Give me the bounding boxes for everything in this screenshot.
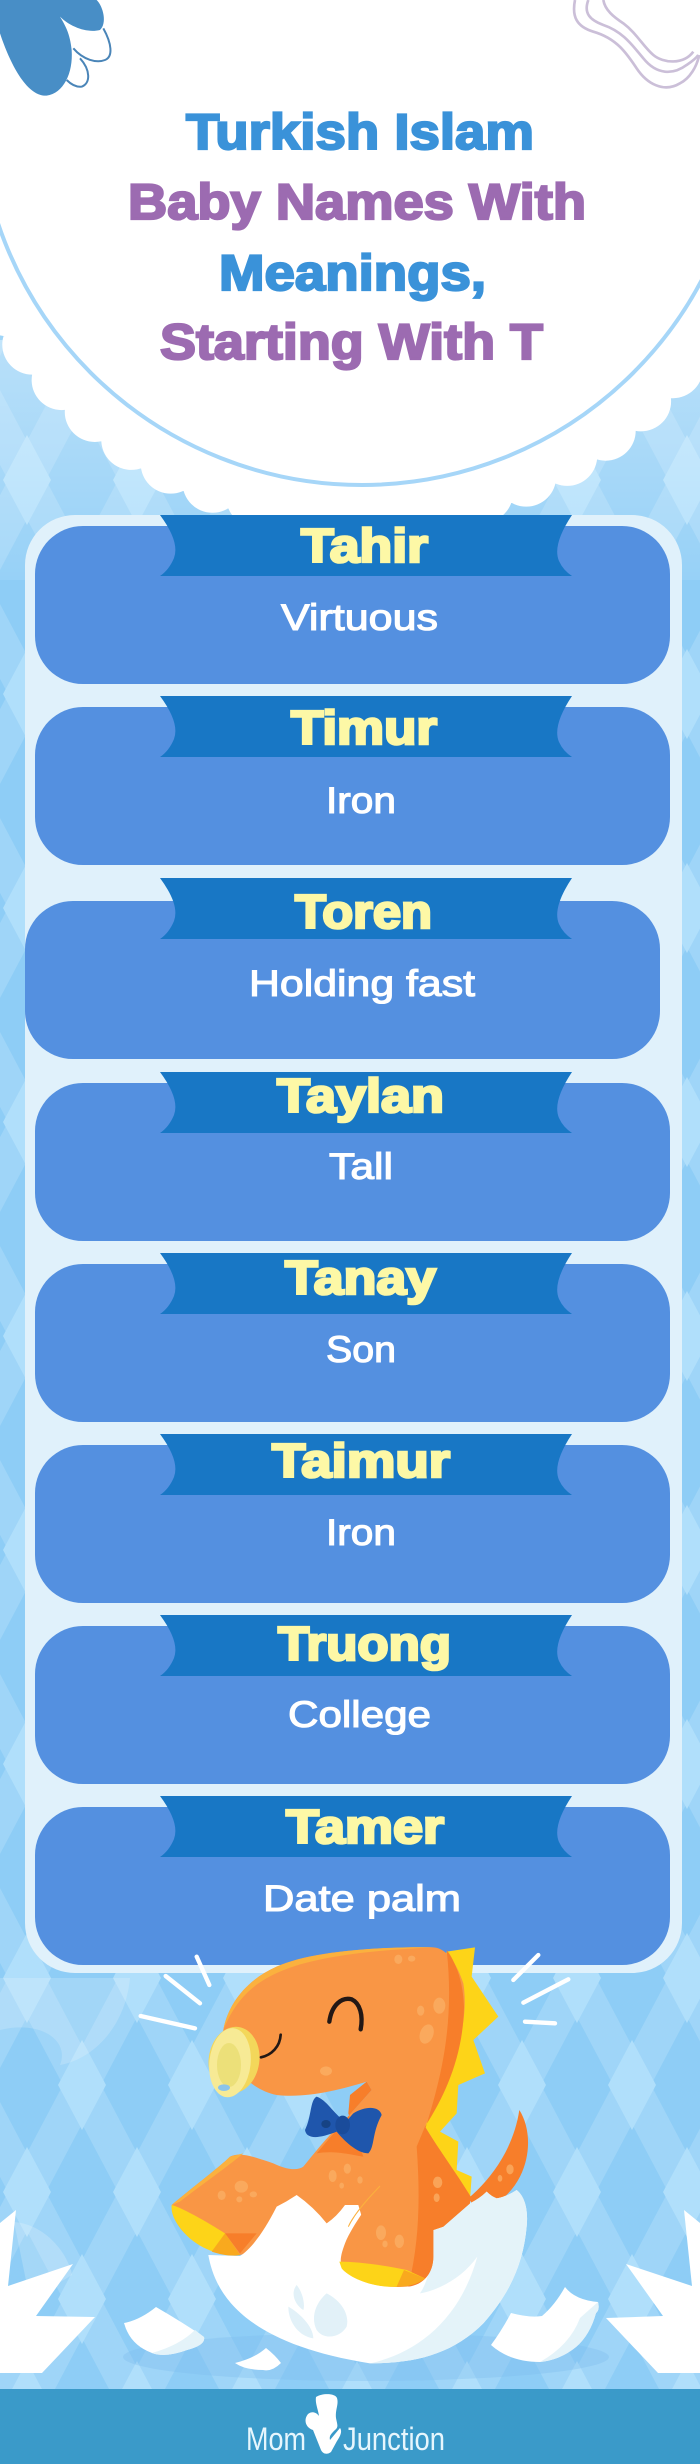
card: Taylan: Tall [329, 1146, 393, 1187]
card: Taimur [35, 1434, 670, 1603]
logo: MomJunction: Junction [343, 2421, 445, 2457]
card: Timur [35, 696, 670, 865]
card: Tahir: Virtuous [281, 597, 438, 638]
left foot [172, 2205, 240, 2255]
title: Meanings, [219, 245, 486, 301]
logo: MomJunction [246, 2394, 445, 2457]
card: Taylan [35, 1069, 670, 1241]
footer band [0, 2389, 700, 2464]
card: Tahir [35, 515, 670, 684]
title: Baby Names With [128, 174, 586, 230]
title: Starting With T [160, 314, 543, 370]
card: Tahir: Tahir [301, 519, 428, 572]
dino body and left leg [172, 1947, 472, 2273]
card: Taimur: Iron [326, 1512, 396, 1553]
card: Toren: Holding fast [249, 963, 476, 1004]
dino freckles [218, 1955, 514, 2248]
card: Timur: Iron [326, 780, 396, 821]
shell fragments [124, 2287, 599, 2370]
logo: MomJunction: Mom [246, 2421, 306, 2457]
card: Tanay [35, 1251, 670, 1422]
dino spikes [425, 1947, 498, 2200]
card: Tanay: Tanay [285, 1251, 436, 1304]
title [128, 104, 586, 370]
card: Truong: Truong [278, 1617, 451, 1670]
title: Turkish Islam [186, 104, 534, 160]
bow tie [305, 2097, 382, 2153]
card: Toren: Toren [295, 885, 432, 938]
icon: lilac waves top right [574, 0, 699, 87]
card: Tamer [35, 1796, 670, 1965]
card: Tamer: Tamer [286, 1800, 444, 1853]
card: Taimur: Taimur [272, 1434, 450, 1487]
header scalloped circle [0, 0, 700, 521]
card: Truong: College [288, 1694, 431, 1735]
egg shell [208, 2190, 527, 2363]
dino eyes [261, 1999, 362, 2057]
panel: names list backing [25, 515, 682, 1973]
card: Tamer: Date palm [263, 1878, 461, 1919]
card: Taylan: Taylan [277, 1069, 444, 1122]
card: Truong [35, 1615, 670, 1784]
dino tail [468, 2110, 528, 2210]
dino right leg [341, 2140, 470, 2287]
decorative white bursts at bottom corners [0, 2210, 700, 2373]
icon: blue ears top left [0, 0, 110, 96]
card: Timur: Timur [291, 701, 437, 754]
card: Toren [25, 878, 660, 1059]
card: Tanay: Son [326, 1329, 396, 1370]
illustration: baby dinosaur hatching from egg [141, 1947, 568, 2363]
excitement streaks [141, 1955, 568, 2028]
egg ground shadow [123, 2333, 609, 2381]
pacifier [204, 2023, 264, 2099]
